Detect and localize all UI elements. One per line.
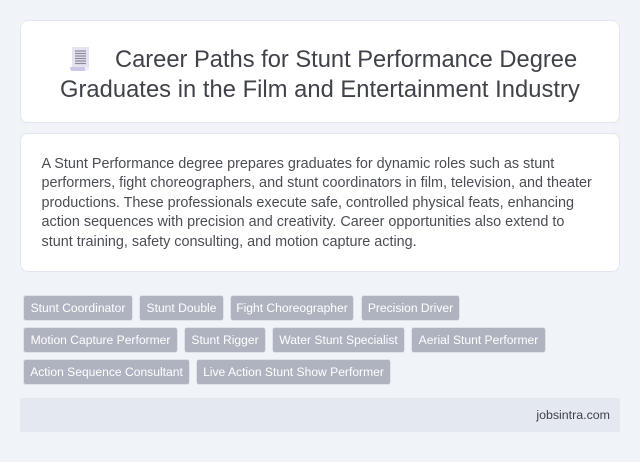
description text: action sequences with precision and creativity. Career opportunities also extend to (42, 214, 564, 230)
title line 2: Graduates in the Film and Entertainment Industry (60, 77, 580, 103)
footer bar (20, 398, 620, 432)
tag: Fight Choreographer (236, 301, 348, 315)
tag: Stunt Double (147, 301, 216, 315)
tag (230, 295, 354, 321)
description text: performers, fight choreographers, and stunt coordinators in film, television, and theater (42, 175, 592, 191)
panel: description card (20, 133, 620, 272)
title line 1: Career Paths for Stunt Performance Degree (115, 47, 577, 73)
tag (411, 327, 546, 353)
tag (361, 295, 460, 321)
tag: Motion Capture Performer (31, 333, 170, 347)
tag: Live Action Stunt Show Performer (203, 365, 384, 379)
tag (184, 327, 266, 353)
footer source text: jobsintra.com (536, 408, 610, 422)
tag (23, 295, 133, 321)
tag: Water Stunt Specialist (279, 333, 398, 347)
tag: Aerial Stunt Performer (419, 333, 538, 347)
tag: Stunt Rigger (191, 333, 259, 347)
tag (139, 295, 224, 321)
tag list: career roles (23, 295, 546, 385)
tag (23, 327, 178, 353)
description text: stunt training, safety consulting, and motion capture acting. (42, 234, 417, 250)
tag: Stunt Coordinator (31, 301, 125, 315)
tag (23, 359, 190, 385)
description text: productions. These professionals execute safe, controlled physical feats, enhancing (42, 195, 574, 211)
tag: Action Sequence Consultant (30, 365, 183, 379)
tag (272, 327, 405, 353)
description text (42, 156, 592, 250)
tag: Precision Driver (368, 301, 453, 315)
description text: A Stunt Performance degree prepares graduates for dynamic roles such as stunt (42, 156, 554, 172)
icon: document scroll (70, 47, 89, 71)
panel: title card (20, 20, 620, 123)
tag (196, 359, 391, 385)
